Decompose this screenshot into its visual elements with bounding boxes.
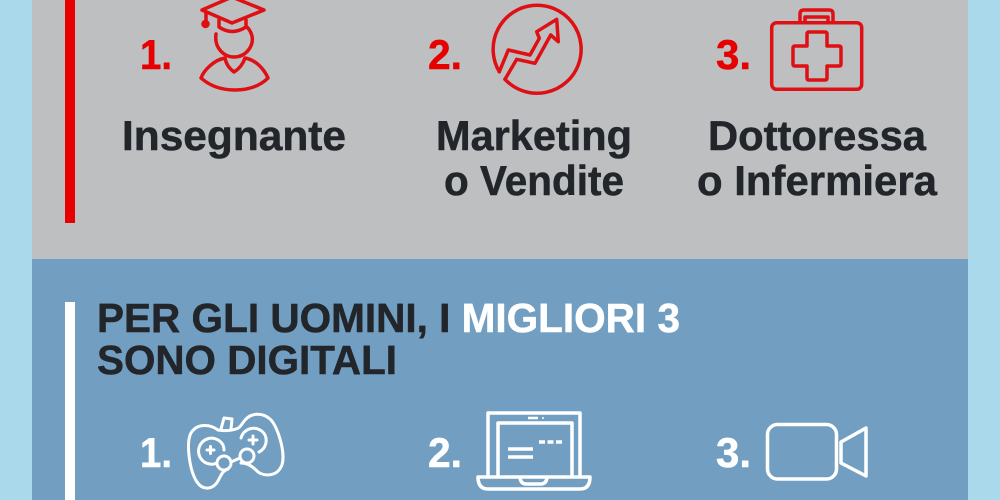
label: Dottoressa o Infermiera: o Infermiera [697, 157, 938, 204]
number 1: 1. [140, 429, 172, 476]
panel: men top 3 [32, 259, 968, 500]
label: Dottoressa o Infermiera [697, 112, 938, 204]
label: Marketing o Vendite: Marketing [436, 112, 632, 159]
label: Marketing o Vendite [436, 112, 632, 204]
panel: women top 3 [32, 0, 968, 259]
heading: SONO DIGITALI [97, 337, 397, 383]
label: Dottoressa o Infermiera: Dottoressa [708, 112, 927, 159]
label: Insegnante: Insegnante [122, 112, 346, 159]
number 2: 2. [428, 31, 462, 78]
icon: video camera [768, 424, 866, 479]
icon: laptop [478, 413, 590, 489]
number 3: 3. [716, 31, 751, 78]
number 3: 3. [716, 429, 751, 476]
icon: growth arrow [493, 5, 581, 93]
number 2: 2. [428, 429, 462, 476]
heading [97, 295, 680, 383]
red accent bar [65, 0, 75, 223]
icon: graduate [201, 0, 268, 90]
white accent bar [65, 302, 75, 500]
number 1: 1. [140, 31, 172, 78]
icon: first aid kit [772, 10, 862, 89]
icon: game controller [189, 414, 283, 488]
label: Marketing o Vendite: o Vendite [444, 157, 624, 204]
heading: PER GLI UOMINI, I MIGLIORI 3 [97, 295, 680, 341]
